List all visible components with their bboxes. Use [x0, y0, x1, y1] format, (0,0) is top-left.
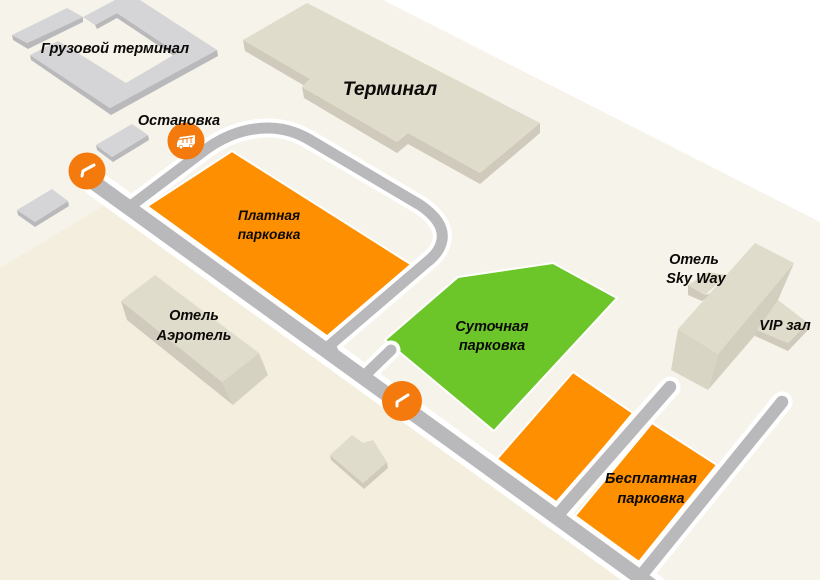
label: VIP hall: VIP зал — [759, 318, 811, 334]
label: hotel Aerotel: Отель — [169, 308, 219, 324]
label: free parking: Бесплатная — [605, 471, 697, 487]
label: main terminal: Терминал — [343, 78, 437, 100]
building: small grey block at left — [17, 189, 69, 227]
label: paid parking: Платная — [238, 208, 300, 223]
label: hotel Sky Way: Sky Way — [666, 271, 727, 287]
parking: free, north lot — [497, 372, 633, 504]
label: daily parking: парковка — [459, 338, 525, 354]
icon: road sign west — [68, 152, 106, 190]
building: cargo terminal — [12, 0, 218, 115]
label: free parking: парковка — [617, 491, 685, 507]
label: daily parking: Суточная — [455, 319, 529, 335]
icon: road sign centre — [382, 381, 422, 421]
label: paid parking: парковка — [238, 227, 301, 242]
building: hotel Sky Way with VIP hall — [671, 243, 808, 390]
roads: grey surface — [96, 128, 782, 580]
building: main terminal — [243, 3, 540, 184]
label: bus stop: Остановка — [138, 113, 220, 129]
parking: paid — [146, 151, 412, 337]
building: hotel Aerotel — [121, 275, 268, 405]
label: cargo terminal: Грузовой терминал — [41, 41, 189, 57]
roads: white casing — [96, 128, 782, 580]
building: small building south of road — [330, 435, 388, 489]
parking: daily — [385, 263, 617, 431]
building: small grey block near stop — [96, 124, 149, 162]
parking: free, south lot — [575, 423, 717, 563]
icon: bus stop — [168, 122, 204, 160]
label: hotel Aerotel: Аэротель — [156, 328, 231, 344]
label: hotel Sky Way: Отель — [669, 252, 719, 268]
